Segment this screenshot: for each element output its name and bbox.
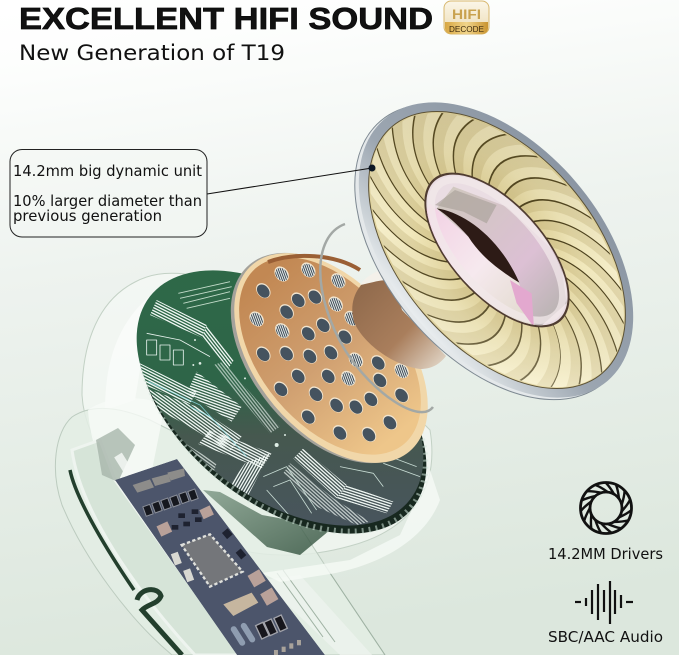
disc: edge stripes <box>94 228 472 582</box>
magnet: perforations <box>246 260 412 445</box>
lens: pale outer band <box>428 176 566 324</box>
shell: stem inner band <box>72 440 240 655</box>
board: silver caps <box>133 468 185 493</box>
disc: white pad dots <box>192 339 286 447</box>
icon: sound wave <box>575 581 633 624</box>
coil highlight <box>360 270 392 285</box>
driver: back rim <box>301 53 679 451</box>
shell: lower right glass plate <box>262 470 440 582</box>
callout: anchor dot <box>368 164 376 172</box>
hifi decode badge <box>444 1 489 34</box>
lens: outer body <box>401 151 593 349</box>
shell: stem outer <box>55 408 385 655</box>
earbud translucent shell <box>55 273 440 655</box>
magnet: copper face <box>203 224 457 488</box>
board base <box>115 459 325 655</box>
subtitle: New Generation of T19 <box>19 41 285 66</box>
lens: lower-left facet <box>426 208 534 325</box>
green translucent wedge <box>203 490 330 555</box>
disc: teal glow streaks <box>148 381 247 457</box>
board: black component row <box>143 489 198 516</box>
callout: line 1: 14.2mm big dynamic unit <box>13 162 202 180</box>
disc: edge thickness <box>93 227 473 585</box>
pcb disc <box>136 270 428 534</box>
callout: leader line <box>207 168 372 194</box>
driver: metal ring <box>305 51 679 449</box>
board: lower black row <box>256 615 287 639</box>
board: main chip <box>182 534 243 587</box>
callout: box <box>10 150 207 237</box>
label: drivers: 14.2MM Drivers <box>548 545 663 563</box>
title: EXCELLENT HIFI SOUND <box>19 1 433 36</box>
board: beige array <box>223 593 258 616</box>
driver: gold fins <box>370 112 624 387</box>
disc: top face <box>90 219 470 577</box>
disc: striped trace bundles <box>137 300 393 525</box>
badge: bottom band <box>445 22 488 34</box>
board: bottom pads <box>274 640 301 655</box>
badge: hifi: HIFI <box>452 6 481 22</box>
board: left small ICs <box>171 552 194 582</box>
lens: pink streak <box>510 280 534 327</box>
shell: right stem lines <box>277 570 385 655</box>
driver: lens <box>424 172 570 328</box>
icon: driver ring <box>580 482 632 534</box>
shell: head inner highlight <box>105 285 165 410</box>
driver: fin shading <box>320 65 674 435</box>
voice coil cylinder <box>352 270 446 369</box>
shell: head outer <box>82 273 432 555</box>
shell: right stem white band <box>262 575 372 655</box>
magnet: silver side wall <box>192 216 464 500</box>
lens: upper-right facet <box>437 187 567 330</box>
lens: dark outline <box>399 148 595 352</box>
shell: dark clip <box>137 590 182 655</box>
driver unit <box>354 102 634 400</box>
shell: clip white outline <box>118 455 190 560</box>
badge: decode: DECODE <box>449 24 484 34</box>
label: audio: SBC/AAC Audio <box>548 628 663 646</box>
shell: inner glass bands <box>88 398 165 480</box>
callout: line 2: 10% larger diameter than <box>13 192 202 210</box>
magnet: brown top arc <box>268 256 360 270</box>
board: long capsules <box>230 622 256 646</box>
copper magnet disc <box>192 216 466 500</box>
lens: dark slit <box>437 208 519 283</box>
disc: black chip marks <box>190 457 262 515</box>
thin wire ring <box>320 224 433 412</box>
circuit board in stem <box>115 459 325 655</box>
disc: fine traces <box>263 459 420 514</box>
shell: grey inner clips <box>96 428 135 482</box>
board: small dark parts <box>172 509 246 559</box>
board: pink parts <box>156 505 278 606</box>
callout: line 3: previous generation <box>13 207 162 225</box>
badge: top <box>444 1 489 34</box>
disc: top trace block <box>178 282 232 308</box>
shell: dark green rail <box>70 470 134 590</box>
lens: grey top reflection <box>435 190 497 223</box>
callout <box>10 150 376 237</box>
magnet: cream rim <box>196 217 466 499</box>
driver: gold base <box>318 64 676 436</box>
disc: component pads left <box>147 333 210 365</box>
